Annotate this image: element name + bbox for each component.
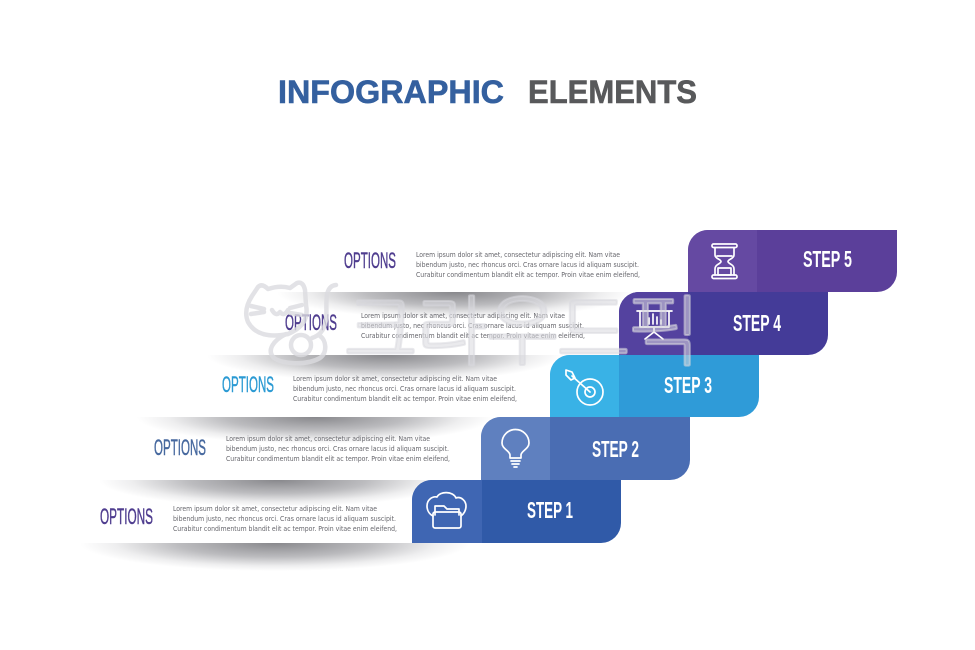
option row 3: bibendum justo, nec rhoncus orci. Cras ornare lacus id aliquam suscipit.: [293, 384, 516, 393]
step 4 tab: [619, 292, 828, 355]
option row 5: bibendum justo, nec rhoncus orci. Cras ornare lacus id aliquam suscipit.: [416, 260, 639, 269]
title: ELEMENTS: [528, 74, 697, 110]
step 4 tab: STEP 4: [733, 310, 781, 336]
option row 3: [222, 372, 517, 403]
option row 5: Curabitur condimentum blandit elit ac tempor. Proin vitae enim eleifend,: [416, 270, 640, 279]
option row 3: Curabitur condimentum blandit elit ac tempor. Proin vitae enim eleifend,: [293, 394, 517, 403]
step 1 tab: STEP 1: [527, 497, 573, 523]
icon: presentation board: [637, 311, 672, 339]
option row 4: [285, 310, 585, 340]
watermark: brand text: 크라우드픽: [345, 293, 700, 369]
icon: light bulb: [502, 430, 529, 467]
option row 4: bibendum justo, nec rhoncus orci. Cras ornare lacus id aliquam suscipit.: [361, 321, 584, 330]
step 2 tab: [481, 417, 690, 480]
step 3 tab: [550, 355, 759, 417]
option row 2: bibendum justo, nec rhoncus orci. Cras ornare lacus id aliquam suscipit.: [226, 444, 449, 453]
option row 2: Curabitur condimentum blandit elit ac tempor. Proin vitae enim eleifend,: [226, 454, 450, 463]
option row 4: Curabitur condimentum blandit elit ac tempor. Proin vitae enim eleifend,: [361, 331, 585, 340]
option row 4: Lorem ipsum dolor sit amet, consectetur adipiscing elit. Nam vitae: [361, 311, 565, 320]
step 2 tab: STEP 2: [592, 436, 639, 462]
title: INFOGRAPHIC: [278, 74, 504, 110]
title: [278, 74, 697, 110]
icon: hourglass: [712, 244, 737, 278]
icon: cloud folder: [427, 493, 466, 528]
option row 3: Lorem ipsum dolor sit amet, consectetur adipiscing elit. Nam vitae: [293, 374, 497, 383]
option row 5: Lorem ipsum dolor sit amet, consectetur adipiscing elit. Nam vitae: [416, 250, 620, 259]
option row 3: OPTIONS: [222, 372, 274, 397]
icon: target with arrow: [566, 370, 603, 405]
option row 1: bibendum justo, nec rhoncus orci. Cras ornare lacus id aliquam suscipit.: [173, 514, 396, 523]
option row 1: Curabitur condimentum blandit elit ac tempor. Proin vitae enim eleifend,: [173, 524, 397, 533]
step 5 tab: [688, 230, 897, 292]
option row 5: [344, 248, 640, 279]
option row 2: OPTIONS: [154, 435, 206, 460]
option row 1: Lorem ipsum dolor sit amet, consectetur adipiscing elit. Nam vitae: [173, 504, 377, 513]
option row 4: OPTIONS: [285, 310, 337, 335]
option row 1: OPTIONS: [100, 504, 153, 529]
step 3 tab: STEP 3: [664, 372, 712, 398]
option row 2: [154, 434, 450, 463]
shadows under option rows: [97, 292, 618, 568]
option row 1: [100, 504, 397, 533]
option row 5: OPTIONS: [344, 248, 396, 273]
step 5 tab: STEP 5: [803, 246, 852, 272]
step 1 tab: [412, 480, 621, 543]
option row 2: Lorem ipsum dolor sit amet, consectetur adipiscing elit. Nam vitae: [226, 434, 430, 443]
watermark: cat with camera: [246, 283, 336, 363]
